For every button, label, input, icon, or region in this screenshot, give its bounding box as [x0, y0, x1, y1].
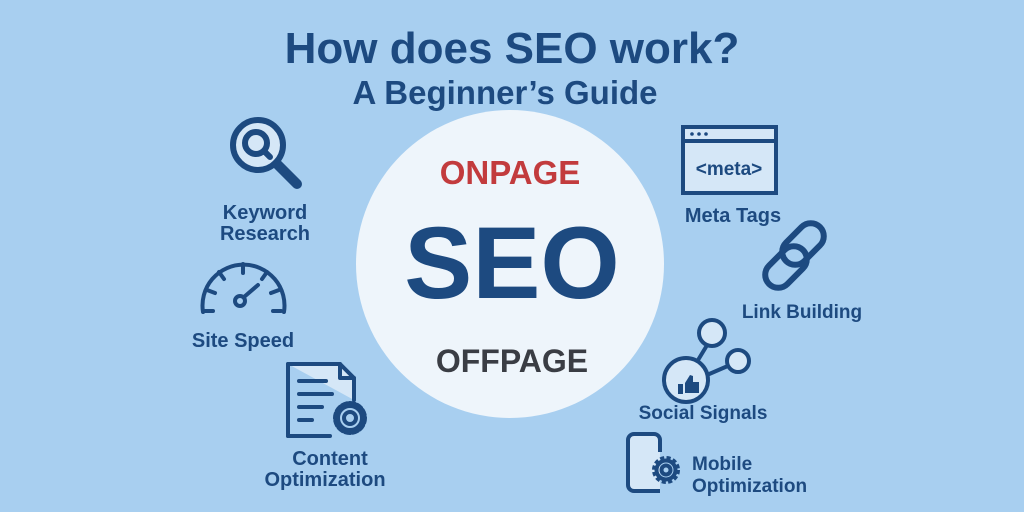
- icon: speedometer: [202, 264, 284, 312]
- item: link building: Link Building: [742, 302, 862, 323]
- item: social signals: Social Signals: [639, 403, 767, 424]
- item: content optimization: Content: [292, 448, 368, 470]
- item: content optimization: Optimization: [264, 469, 386, 491]
- icon: document with gear: [288, 364, 365, 436]
- central circle: [356, 110, 664, 418]
- icon: browser window: <meta>: [696, 159, 762, 180]
- offpage label: OFFPAGE: [436, 343, 588, 379]
- item: link building: [742, 218, 862, 323]
- item: mobile optimization: Mobile: [692, 454, 752, 475]
- subtitle: A Beginner’s Guide: [352, 74, 658, 111]
- item: mobile optimization: Optimization: [692, 476, 807, 497]
- item: keyword research: Keyword: [223, 202, 307, 224]
- item: keyword research: Research: [220, 223, 310, 245]
- icon: phone with gear: [628, 434, 678, 491]
- item: meta tags: Meta Tags: [685, 205, 781, 227]
- title: How does SEO work?: [285, 24, 739, 73]
- item: keyword research: [220, 120, 310, 245]
- item: site speed: [192, 264, 294, 352]
- icon: network thumbs up: [664, 320, 749, 402]
- item: mobile optimization: [628, 434, 807, 497]
- icon: magnifier: [233, 120, 297, 184]
- icon: chain link: [760, 218, 829, 293]
- onpage label: ONPAGE: [440, 154, 580, 191]
- item: site speed: Site Speed: [192, 330, 294, 352]
- item: social signals: [639, 320, 767, 424]
- item: content optimization: [264, 364, 386, 491]
- SEO label: SEO: [404, 206, 620, 320]
- item: meta tags: [683, 127, 781, 227]
